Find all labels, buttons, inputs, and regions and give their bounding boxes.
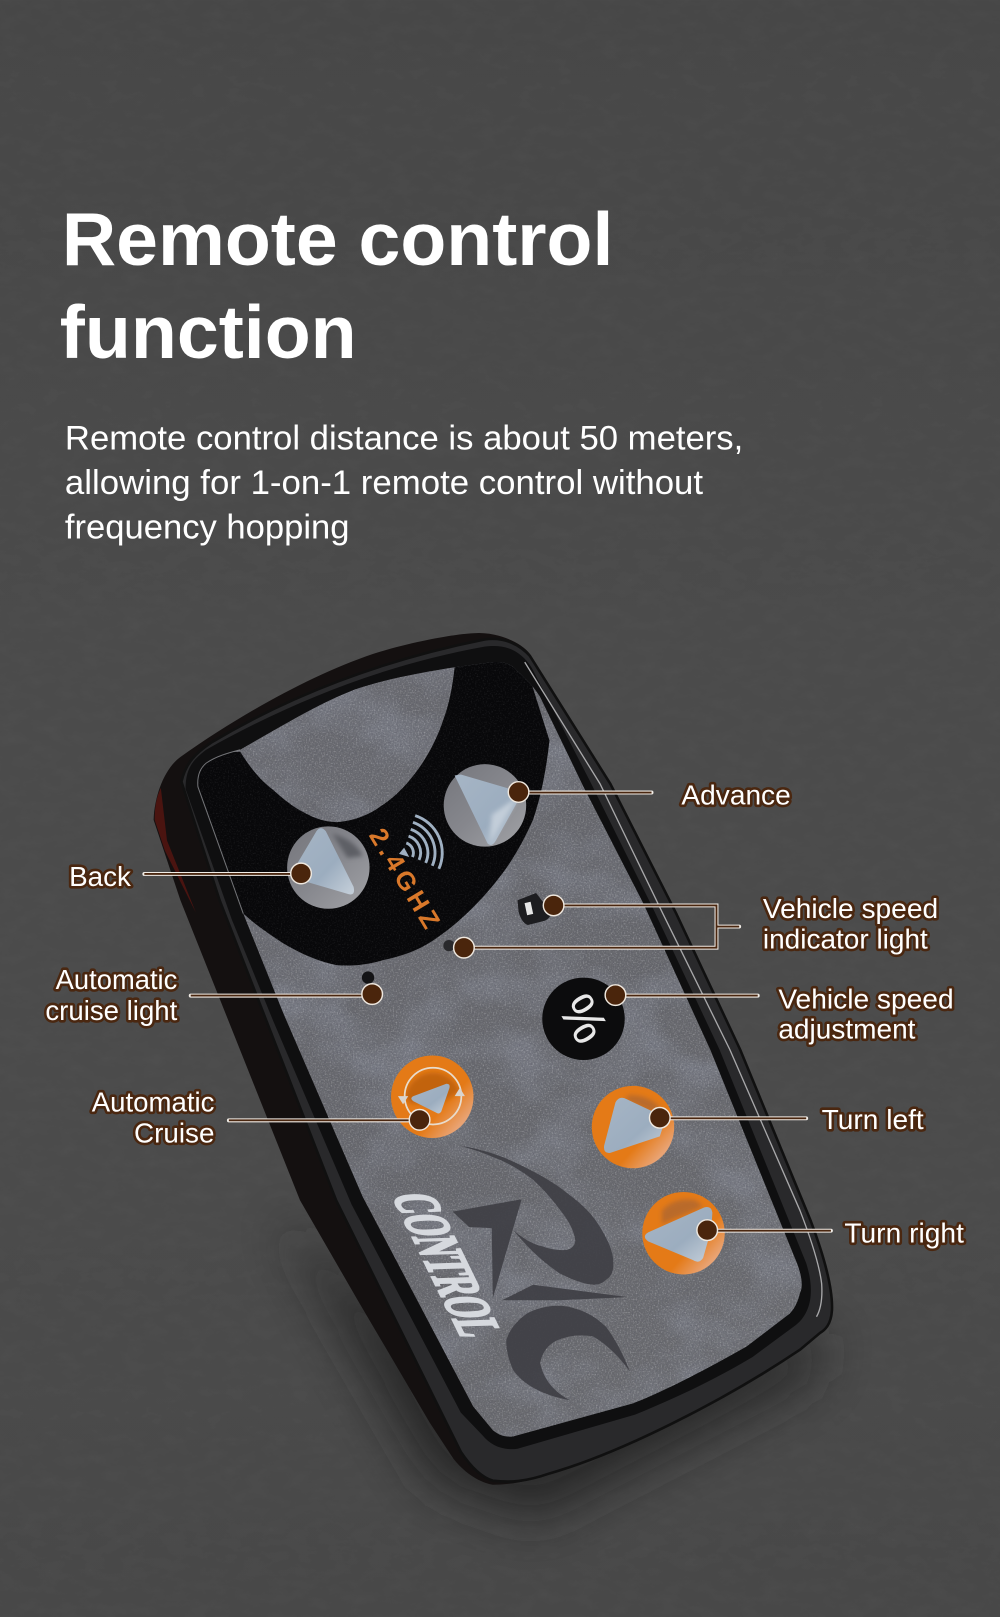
callout: Turn right: Turn right bbox=[844, 1218, 964, 1249]
panel edge highlight bbox=[198, 750, 243, 914]
callout: Vehicle speed indicator light bbox=[454, 893, 938, 958]
black crescent bbox=[191, 652, 549, 966]
callout: Automatic Cruise: Automatic bbox=[92, 1087, 215, 1118]
callout: Advance: Advance bbox=[681, 779, 791, 810]
turn left button bbox=[592, 1086, 674, 1168]
callout: Back: Back bbox=[69, 861, 131, 892]
shadow under remote bbox=[278, 1217, 825, 1521]
speed indicator LED chip bbox=[518, 893, 551, 925]
title: function bbox=[60, 290, 357, 374]
2.4GHz mark: 2.4GHZ bbox=[363, 824, 445, 934]
callout: Turn left bbox=[649, 1104, 924, 1135]
callout: Automatic Cruise bbox=[92, 1087, 430, 1149]
remote grey face bbox=[186, 650, 825, 1454]
callout: Vehicle speed indicator light: indicator light bbox=[763, 924, 928, 955]
red edge glint bbox=[155, 788, 196, 913]
remote body side bbox=[154, 633, 832, 1485]
CONTROL wordmark: CONTROL bbox=[378, 1192, 517, 1338]
callout: Vehicle speed adjustment bbox=[605, 984, 954, 1044]
advance button bbox=[444, 764, 526, 847]
back button bbox=[287, 826, 370, 909]
cruise indicator LED bbox=[362, 971, 374, 984]
speed indicator LED bbox=[443, 940, 455, 951]
speed adjustment button: % bbox=[547, 984, 621, 1053]
description text: allowing for 1-on-1 remote control without bbox=[65, 464, 703, 502]
callout: Vehicle speed adjustment: Vehicle speed bbox=[778, 983, 954, 1015]
title bbox=[60, 197, 613, 374]
turn right button bbox=[642, 1192, 725, 1274]
title: Remote control bbox=[62, 197, 613, 281]
automatic cruise button bbox=[391, 1056, 474, 1138]
callout: Back bbox=[69, 861, 311, 892]
description text: Remote control distance is about 50 meters, bbox=[65, 420, 743, 458]
description text bbox=[65, 420, 743, 546]
callout: Automatic cruise light: Automatic bbox=[56, 964, 177, 995]
callout: Turn right bbox=[697, 1218, 964, 1249]
white ridge line bbox=[525, 662, 822, 1317]
callout: Turn left: Turn left bbox=[822, 1104, 924, 1135]
icon: wireless signal arcs bbox=[399, 816, 442, 869]
callout: Advance bbox=[508, 779, 791, 810]
remote front frame bbox=[181, 639, 832, 1482]
description text: frequency hopping bbox=[65, 508, 349, 546]
callout: Automatic cruise light bbox=[45, 964, 382, 1026]
callout: Vehicle speed adjustment: adjustment bbox=[778, 1013, 916, 1044]
callout: Automatic Cruise: Cruise bbox=[134, 1118, 214, 1149]
remote control device bbox=[154, 633, 832, 1485]
black inner ring bbox=[186, 646, 811, 1449]
R/C logo bbox=[453, 1146, 630, 1400]
callout: Vehicle speed indicator light: Vehicle speed bbox=[763, 893, 938, 924]
callout: Automatic cruise light: cruise light bbox=[45, 995, 178, 1026]
